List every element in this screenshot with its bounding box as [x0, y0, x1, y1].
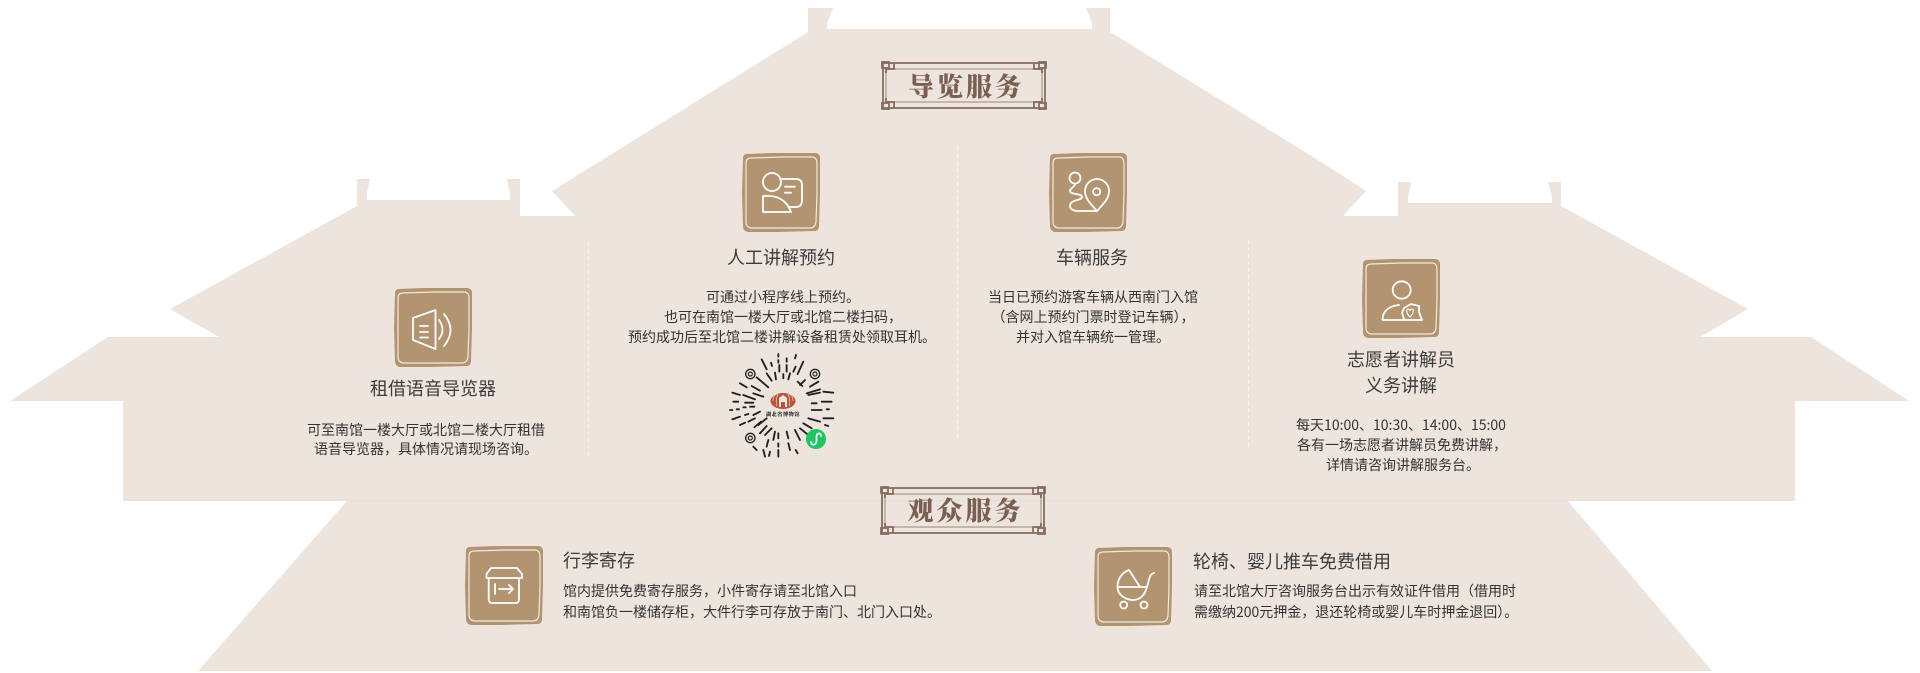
mini program code	[730, 354, 833, 457]
mini program code: 湖北省博物馆	[766, 410, 800, 418]
panel: 行李寄存	[465, 546, 941, 625]
icon: person with speech bubble	[742, 153, 820, 232]
description: 可至南馆一楼大厅或北馆二楼大厅租借	[307, 420, 545, 440]
icon: volunteer	[1362, 259, 1440, 338]
panel: 租借语音导览器	[307, 288, 545, 459]
heading plate: 导览服务	[882, 62, 1046, 109]
heading plate: 观众服务: 观众服务	[907, 491, 1024, 528]
heading: 轮椅、婴儿推车免费借用	[1193, 548, 1391, 574]
description: （含网上预约门票时登记车辆），	[992, 307, 1194, 327]
description: 各有一场志愿者讲解员免费讲解，	[1297, 435, 1507, 455]
description: 预约成功后至北馆二楼讲解设备租赁处领取耳机。	[628, 327, 936, 347]
heading: 义务讲解	[1365, 372, 1437, 398]
icon: luggage box	[465, 546, 543, 625]
heading plate: 观众服务	[881, 487, 1045, 534]
icon: stroller	[1094, 547, 1172, 626]
icon: route and map pin	[1049, 153, 1127, 232]
description: 语音导览器，具体情况请现场咨询。	[314, 439, 538, 459]
icon: speaker	[394, 288, 472, 367]
heading: 志愿者讲解员	[1347, 346, 1455, 372]
heading: 行李寄存	[563, 547, 635, 573]
description: 馆内提供免费寄存服务，小件寄存请至北馆入口	[563, 581, 857, 601]
heading: 车辆服务	[1056, 244, 1128, 270]
panel: 人工讲解预约	[628, 153, 936, 457]
description: 也可在南馆一楼大厅或北馆二楼扫码，	[664, 307, 902, 327]
description: 每天10:00、10:30、14:00、15:00	[1296, 415, 1506, 435]
heading: 人工讲解预约	[727, 244, 835, 270]
panel: 轮椅、婴儿推车免费借用	[1094, 547, 1518, 626]
panel: 志愿者讲解员义务讲解	[1296, 259, 1507, 475]
description: 当日已预约游客车辆从西南门入馆	[988, 287, 1198, 307]
description: 请至北馆大厅咨询服务台出示有效证件借用（借用时	[1194, 581, 1516, 601]
description: 并对入馆车辆统一管理。	[1016, 327, 1170, 347]
panel: 车辆服务	[988, 153, 1198, 347]
description: 和南馆负一楼储存柜，大件行李可存放于南门、北门入口处。	[563, 602, 941, 622]
description: 可通过小程序线上预约。	[706, 287, 860, 307]
heading: 租借语音导览器	[370, 375, 496, 401]
heading plate: 导览服务: 导览服务	[908, 67, 1024, 104]
description: 需缴纳200元押金，退还轮椅或婴儿车时押金退回）。	[1194, 602, 1518, 622]
description: 详情请咨询讲解服务台。	[1326, 455, 1480, 475]
